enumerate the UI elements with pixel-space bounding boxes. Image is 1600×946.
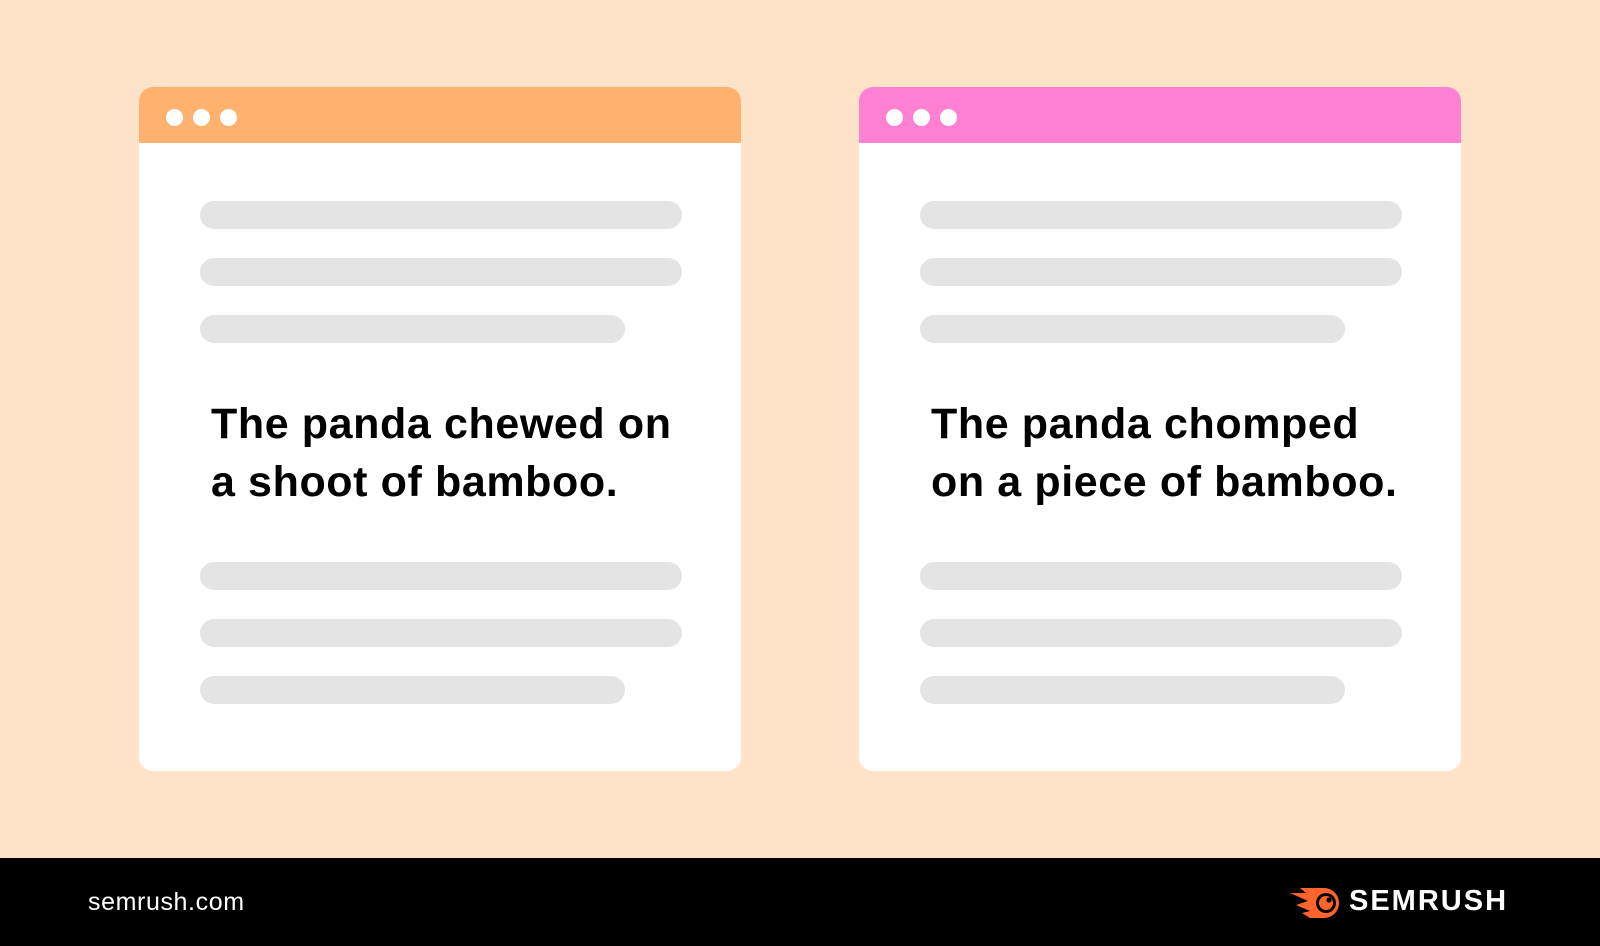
sentence: The panda chewed on (211, 400, 672, 448)
logo: SEMRUSH (1349, 885, 1508, 917)
sentence: The panda chomped (931, 400, 1359, 448)
placeholder lines bottom (200, 562, 682, 704)
icon: semrush flame (1290, 888, 1339, 918)
footer url: semrush.com (88, 888, 245, 916)
panel: left browser window (139, 87, 741, 771)
sentence (211, 400, 672, 506)
footer bar (0, 858, 1600, 946)
sentence (931, 400, 1398, 506)
placeholder lines top (920, 201, 1402, 343)
window dots (166, 109, 237, 126)
placeholder lines top (200, 201, 682, 343)
header bar orange (139, 87, 741, 143)
header bar pink (859, 87, 1461, 143)
window dots (886, 109, 957, 126)
sentence: on a piece of bamboo. (931, 458, 1398, 506)
placeholder lines bottom (920, 562, 1402, 704)
sentence: a shoot of bamboo. (211, 458, 618, 506)
panel: right browser window (859, 87, 1461, 771)
